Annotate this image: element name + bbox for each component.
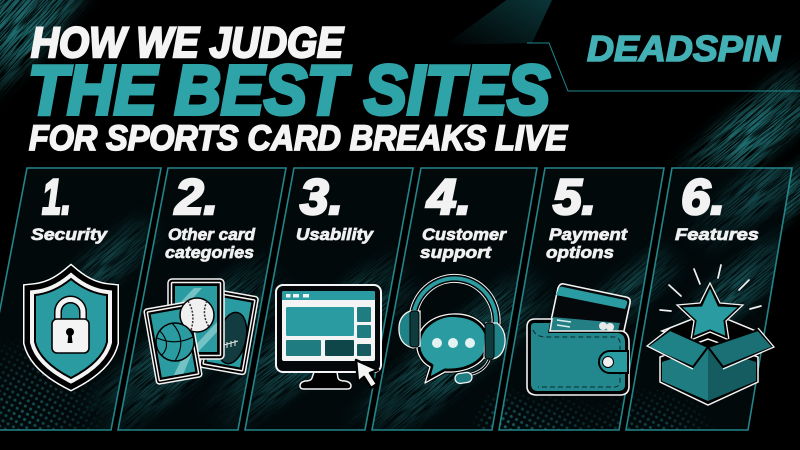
label other card categories: categories <box>165 243 254 262</box>
title line 2: THE BEST SITES <box>28 51 550 129</box>
icon: open box with star <box>647 265 774 405</box>
logo frame line <box>527 43 800 91</box>
icon: three sports cards <box>144 279 259 384</box>
panel fills <box>0 168 792 430</box>
icon: speech bubble with headset <box>399 278 505 384</box>
number 4: 4. <box>426 169 471 225</box>
panel 5: payment options <box>499 168 664 430</box>
label customer support: support <box>420 243 492 262</box>
number 5: 5. <box>553 169 596 225</box>
label other card categories <box>165 225 256 262</box>
panel 2: other card categories <box>118 168 286 430</box>
label usability: Usability <box>296 225 375 244</box>
label payment options <box>546 225 628 262</box>
panel 4: customer support <box>372 168 537 430</box>
title line 3: FOR SPORTS CARD BREAKS LIVE <box>29 119 569 158</box>
panel streak and halftone textures <box>0 168 791 430</box>
icon: monitor with cursor <box>276 285 381 389</box>
label customer support: Customer <box>422 225 507 244</box>
panel 3: usability <box>245 168 413 430</box>
number 2: 2. <box>174 169 218 225</box>
number 1: 1. <box>42 169 71 225</box>
panel 6: features <box>626 168 792 430</box>
background corner streaks <box>0 0 800 262</box>
label payment options: options <box>546 243 614 262</box>
icon: shield with padlock <box>35 279 107 378</box>
label security: Security <box>31 225 109 244</box>
title line 1: HOW WE JUDGE <box>31 19 344 67</box>
label customer support <box>420 225 507 262</box>
title <box>28 19 569 158</box>
icon: wallet with card <box>527 284 630 395</box>
label other card categories: Other card <box>168 225 256 244</box>
label features: Features <box>675 225 759 244</box>
number 6: 6. <box>681 169 725 225</box>
logo: Deadspin: DEADSPIN <box>587 28 781 69</box>
label payment options: Payment <box>549 225 628 244</box>
panel 1: security <box>0 168 161 430</box>
number 3: 3. <box>300 169 343 225</box>
